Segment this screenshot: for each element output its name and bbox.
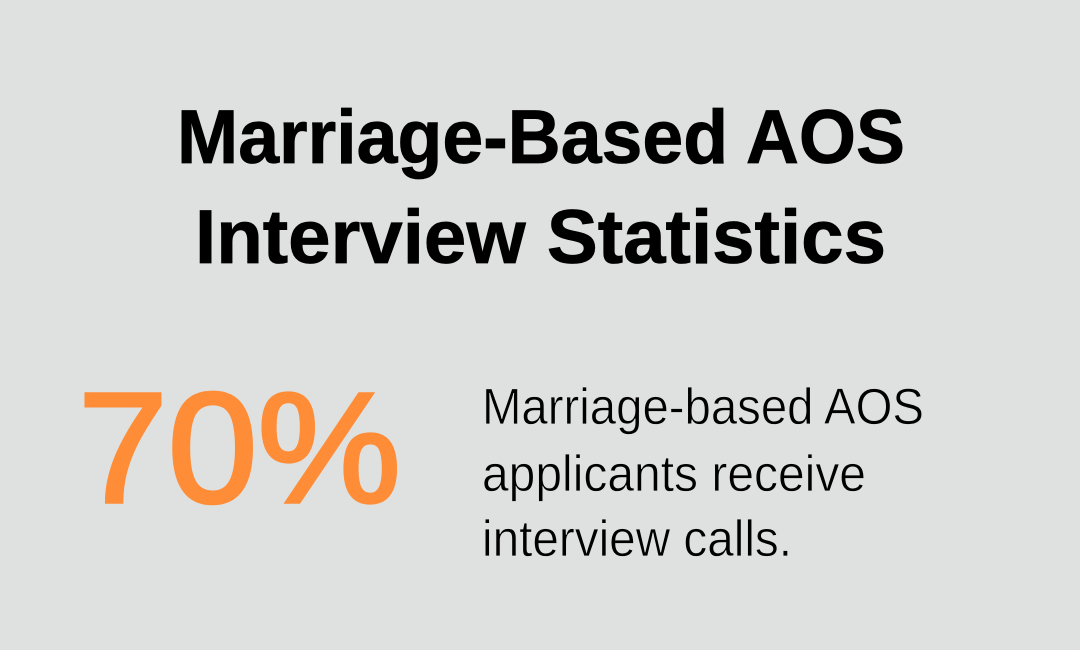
description text: Marriage-based AOS [482,378,924,435]
title: Marriage-Based AOS [177,95,905,180]
title: Interview Statistics [195,195,886,280]
description text: applicants receive [482,445,866,502]
description text [482,378,924,567]
description text: interview calls. [482,510,792,567]
statistic: 70%: 70% [78,361,401,536]
title [177,95,905,280]
